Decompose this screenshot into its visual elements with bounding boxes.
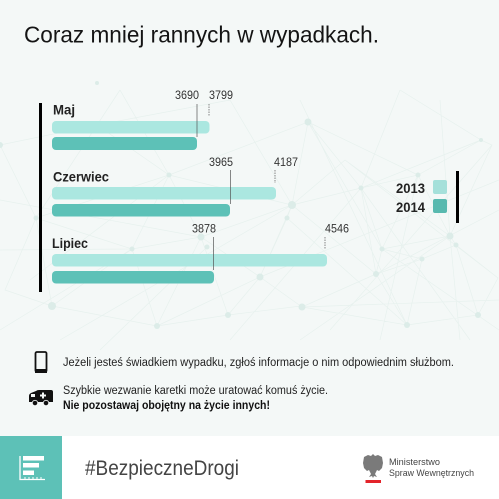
- chart axis: [39, 103, 42, 292]
- group: Czerwiec: 3965: [209, 157, 233, 169]
- group: Lipiec: Lipiec: [52, 235, 88, 251]
- group: Lipiec: [52, 224, 349, 284]
- footer teal tile with chart icon: [0, 436, 62, 499]
- group: Lipiec: 3878: [192, 224, 216, 236]
- footer: [0, 436, 499, 499]
- text: report accident: Jeżeli jesteś świadkiem wypadku, zgłoś informacje o nim odpowiednim służbom.: [63, 357, 454, 369]
- legend: 2013: [396, 180, 425, 196]
- icon: smartphone: [35, 352, 47, 373]
- logo: ministry: Spraw Wewnętrznych: [389, 468, 474, 479]
- group: Lipiec: 4546: [325, 224, 349, 236]
- icon: ambulance: [29, 390, 53, 406]
- hashtag: #BezpieczneDrogi: [85, 457, 239, 480]
- group: Czerwiec: 4187: [274, 157, 298, 169]
- group: Maj: [52, 90, 233, 150]
- group: Maj: 3690: [175, 90, 199, 102]
- group: Maj: Maj: [53, 102, 75, 118]
- legend: 2014: [396, 199, 425, 215]
- group: Maj: 3799: [209, 90, 233, 102]
- group: Czerwiec: Czerwiec: [53, 168, 109, 184]
- text: quick call: Nie pozostawaj obojętny na życie innych!: [63, 400, 270, 412]
- text: quick call: Szybkie wezwanie karetki może uratować komuś życie.: [63, 385, 328, 397]
- logo: ministry: Ministerstwo: [389, 457, 440, 468]
- bar chart: injured by month: [39, 90, 349, 292]
- title: Coraz mniej rannych w wypadkach.: [24, 22, 379, 48]
- logo: ministry: [363, 454, 474, 483]
- text: quick call: [63, 385, 328, 412]
- legend: [396, 171, 459, 223]
- group: Czerwiec: [52, 157, 298, 216]
